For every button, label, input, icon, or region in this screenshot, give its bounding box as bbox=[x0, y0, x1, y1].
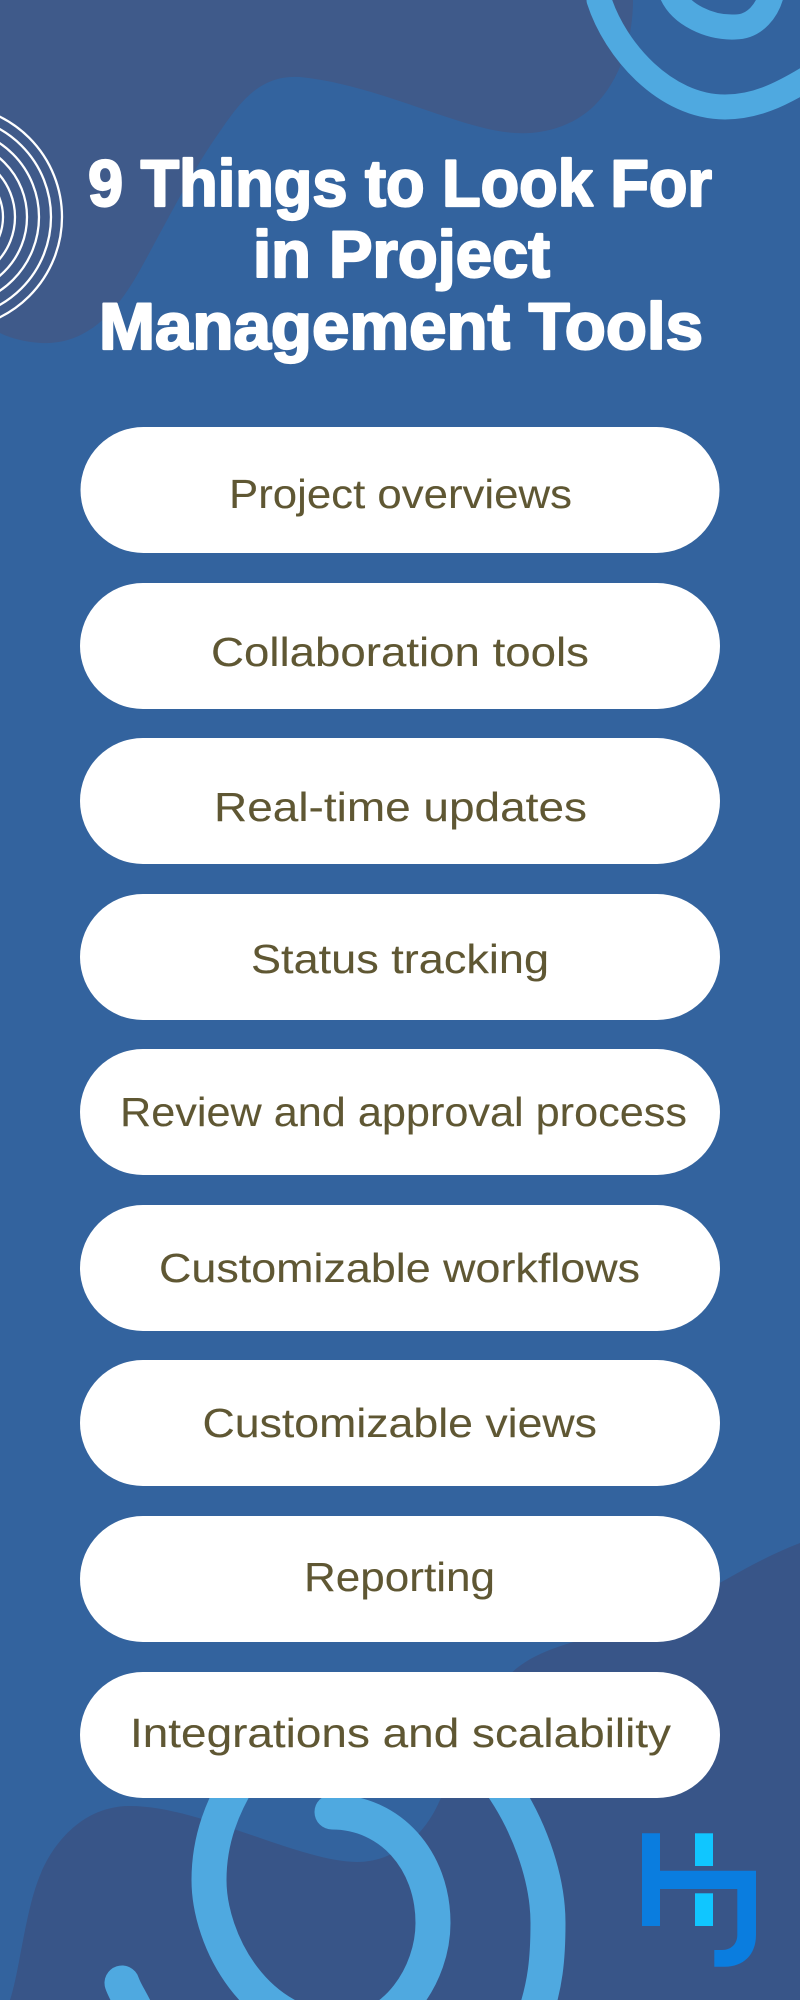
decorative concentric rings bbox=[0, 105, 62, 329]
item 7: customizable views bbox=[80, 1360, 720, 1486]
item 8: reporting bbox=[80, 1516, 720, 1642]
item 1: project overviews bbox=[80, 427, 720, 553]
title bbox=[88, 146, 712, 363]
title: 9 Things to Look For bbox=[88, 146, 712, 220]
item 6: customizable workflows bbox=[80, 1205, 720, 1331]
item 7: customizable views: Customizable views bbox=[202, 1400, 597, 1446]
item 2: collaboration tools bbox=[80, 583, 720, 709]
item 2: collaboration tools: Collaboration tools bbox=[211, 629, 589, 675]
item 5: review and approval process: Review and approval process bbox=[120, 1089, 687, 1135]
decorative blob: top left bbox=[0, 0, 633, 343]
item 9: integrations and scalability: Integrations and scalability bbox=[130, 1710, 672, 1756]
item 4: status tracking bbox=[80, 894, 720, 1020]
decorative spiral: top right bbox=[599, 0, 800, 107]
item 9: integrations and scalability bbox=[80, 1672, 720, 1798]
decorative spiral: bottom bbox=[122, 1770, 548, 2000]
item 1: project overviews: Project overviews bbox=[229, 471, 572, 517]
item 3: real-time updates: Real-time updates bbox=[214, 784, 587, 830]
item 4: status tracking: Status tracking bbox=[251, 936, 549, 982]
item 5: review and approval process bbox=[80, 1049, 720, 1175]
icon: logo bbox=[642, 1833, 756, 1967]
title: Management Tools bbox=[99, 289, 703, 363]
item 8: reporting: Reporting bbox=[304, 1554, 495, 1600]
item 3: real-time updates bbox=[80, 738, 720, 864]
item 6: customizable workflows: Customizable workflows bbox=[159, 1245, 640, 1291]
title: in Project bbox=[253, 217, 550, 291]
decorative blob: bottom bbox=[10, 1543, 800, 2000]
